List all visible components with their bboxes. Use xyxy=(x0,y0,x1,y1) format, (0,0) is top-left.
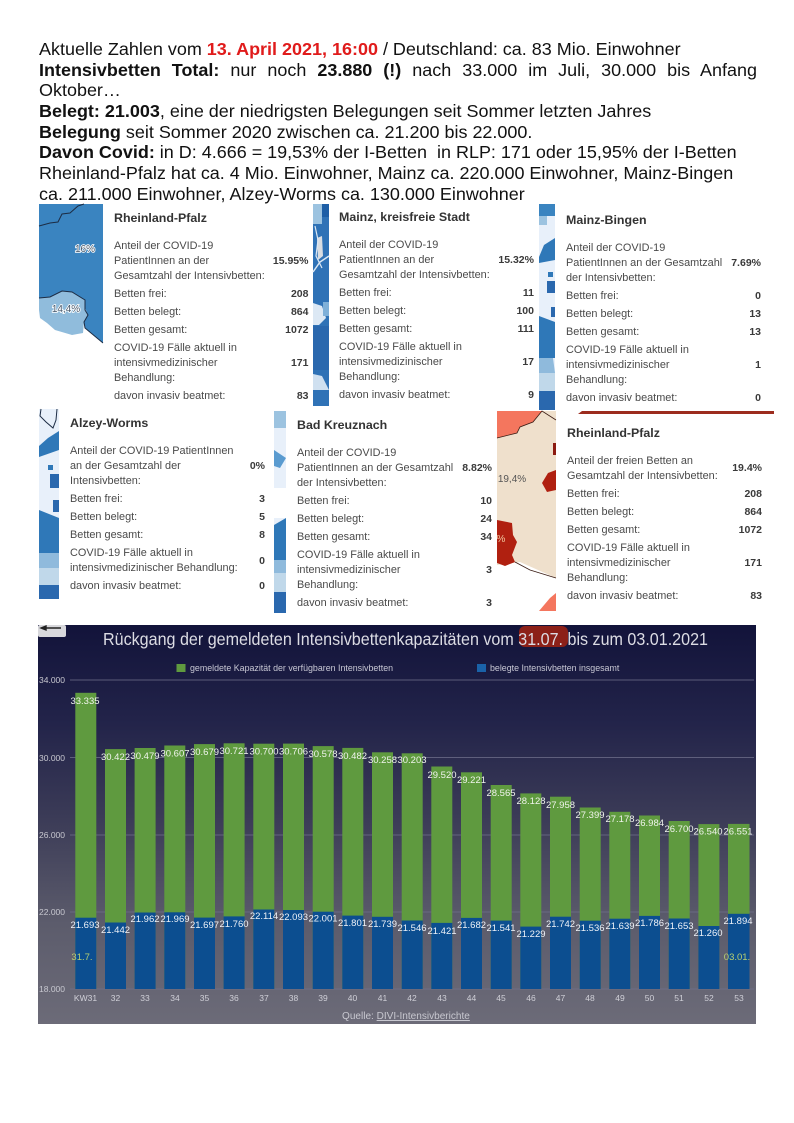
bar 53 xyxy=(723,824,753,1003)
heading: Rheinland-Pfalz xyxy=(567,426,660,440)
stats xyxy=(567,455,763,602)
legend: gemeldete Kapazität der verfügbaren Intensivbetten xyxy=(190,663,393,673)
date highlight xyxy=(519,626,568,647)
stats: 0 xyxy=(755,392,761,404)
bar 48: 48 xyxy=(585,993,595,1003)
intro text block xyxy=(39,39,757,204)
bar 39: 22.001 xyxy=(308,914,338,924)
stats: 100 xyxy=(516,305,534,317)
stats: intensivmedizinischer xyxy=(297,564,401,576)
stats: 171 xyxy=(291,357,309,369)
bar 42: 30.203 xyxy=(397,755,427,766)
stats: Behandlung: xyxy=(567,572,628,584)
bar KW31: 31.7. xyxy=(71,952,93,963)
stats: Betten frei: xyxy=(339,287,392,299)
bar 50: 26.984 xyxy=(635,818,664,829)
bar 37 xyxy=(249,744,279,1003)
bar 32 xyxy=(101,749,130,1003)
bar KW31: 33.335 xyxy=(70,696,100,707)
y axis labels: 18.000 xyxy=(39,984,65,994)
stats: der Intensivbetten: xyxy=(297,477,387,489)
bar 52 xyxy=(693,824,723,1003)
stats: Betten frei: xyxy=(114,288,167,300)
bar 34: 30.607 xyxy=(160,748,190,760)
bar 38 xyxy=(279,744,308,1003)
bar 33: 21.962 xyxy=(130,914,160,925)
bar 51: 21.653 xyxy=(664,921,694,932)
stats: COVID-19 Fälle aktuell in xyxy=(114,342,237,354)
stats: COVID-19 Fälle aktuell in xyxy=(70,547,193,559)
bar 35: 30.679 xyxy=(190,747,219,758)
total intensive beds line: Intensivbetten Total: nur noch 23.880 (!) nach 33.000 im Juli, 30.000 bis Anfang xyxy=(39,60,757,80)
date and population line: Aktuelle Zahlen vom 13. April 2021, 16:00 / Deutschland: ca. 83 Mio. Einwohner xyxy=(39,39,681,59)
bar 48: 27.399 xyxy=(575,810,605,821)
bar 44: 29.221 xyxy=(457,775,486,786)
bar chart panel xyxy=(38,625,756,1024)
stats: 83 xyxy=(750,590,762,602)
bar 53: 26.551 xyxy=(723,826,753,838)
bar 46: 46 xyxy=(526,993,536,1003)
stats: PatientInnen an der xyxy=(339,254,434,266)
stats: 3 xyxy=(486,597,492,609)
stats: intensivmedizinischer xyxy=(566,359,670,371)
bar 49: 49 xyxy=(615,993,625,1003)
map strip: Alzey-Worms xyxy=(39,409,59,599)
panel: Rheinland-Pfalz COVID share xyxy=(39,204,309,402)
bar 52: 26.540 xyxy=(693,826,723,838)
stats: Betten belegt: xyxy=(339,305,406,317)
stats: 0% xyxy=(250,460,266,472)
stats: intensivmedizinischer xyxy=(567,557,671,569)
bar 49 xyxy=(605,812,635,1003)
stats: intensivmedizinischer Behandlung: xyxy=(70,562,238,574)
map: free beds: 19,4% xyxy=(498,474,526,485)
bar 46 xyxy=(516,793,546,1003)
bar 38: 38 xyxy=(289,993,298,1003)
grid lines xyxy=(70,680,754,989)
stats: 15.32% xyxy=(498,254,535,266)
stats: Betten frei: xyxy=(297,495,350,507)
stats: Anteil der COVID-19 xyxy=(566,242,665,254)
bar 33: 30.479 xyxy=(130,751,160,762)
stats: 208 xyxy=(744,488,762,500)
stats: 0 xyxy=(259,555,265,567)
stats: an der Gesamtzahl der xyxy=(70,460,181,472)
heading: Alzey-Worms xyxy=(70,416,148,430)
stats: Behandlung: xyxy=(114,372,175,384)
back arrow button xyxy=(38,625,66,637)
bar 41: 21.739 xyxy=(368,919,397,930)
panel: Alzey-Worms xyxy=(39,409,266,599)
panel: Bad Kreuznach xyxy=(274,411,493,613)
stats: Betten belegt: xyxy=(566,308,633,320)
bar 41: 41 xyxy=(378,993,387,1003)
bar 48 xyxy=(575,808,605,1003)
map: free beds xyxy=(497,411,556,611)
stats: 24 xyxy=(480,513,492,525)
bar 37: 30.700 xyxy=(249,746,279,758)
bar 49: 21.639 xyxy=(605,921,635,932)
stats: intensivmedizinischer xyxy=(339,356,443,368)
heading: Bad Kreuznach xyxy=(297,418,387,432)
stats: 13 xyxy=(749,326,761,338)
bar 44: 21.682 xyxy=(457,920,486,931)
map: Rheinland-Pfalz blue: 16% xyxy=(75,244,95,255)
stats: 7.69% xyxy=(731,257,762,269)
stats: Betten belegt: xyxy=(114,306,181,318)
bar KW31: KW31 xyxy=(74,993,97,1003)
stats: Gesamtzahl der Intensivbetten: xyxy=(567,470,718,482)
stats: Betten gesamt: xyxy=(70,529,143,541)
bar 50: 21.786 xyxy=(635,918,664,929)
bar 36 xyxy=(219,743,249,1003)
bar 43: 43 xyxy=(437,993,447,1003)
stats: 1072 xyxy=(739,524,762,536)
bar 34: 34 xyxy=(170,993,180,1003)
continuation line: Oktober… xyxy=(39,80,121,100)
stats: 111 xyxy=(518,323,534,335)
stats: davon invasiv beatmet: xyxy=(297,597,408,609)
stats: Anteil der COVID-19 xyxy=(339,239,438,251)
stats: 5 xyxy=(259,511,265,523)
stats: Anteil der COVID-19 xyxy=(114,240,213,252)
stats: Betten gesamt: xyxy=(566,326,639,338)
stats: Behandlung: xyxy=(566,374,627,386)
stats: 10 xyxy=(480,495,492,507)
bar 36: 36 xyxy=(229,993,239,1003)
stats: davon invasiv beatmet: xyxy=(566,392,677,404)
bar KW31: 21.693 xyxy=(70,920,100,931)
stats: Anteil der freien Betten an xyxy=(567,455,693,467)
stats xyxy=(566,242,762,404)
bar 47 xyxy=(546,797,575,1003)
stats: 0 xyxy=(259,580,265,592)
bar 37: 22.114 xyxy=(250,911,278,922)
population line two: ca. 211.000 Einwohner, Alzey-Worms ca. 130.000 Einwohner xyxy=(39,184,525,204)
stats: PatientInnen an der xyxy=(114,255,209,267)
bar 35 xyxy=(190,744,219,1003)
bar 53: 53 xyxy=(734,993,744,1003)
bar 39 xyxy=(308,746,338,1003)
stats: Behandlung: xyxy=(297,579,358,591)
stats: Gesamtzahl der Intensivbetten: xyxy=(339,269,490,281)
bar 41: 30.258 xyxy=(368,755,397,766)
bar 47: 21.742 xyxy=(546,919,575,930)
bar 44 xyxy=(457,772,486,1003)
stats: 3 xyxy=(259,493,265,505)
stats: COVID-19 Fälle aktuell in xyxy=(297,549,420,561)
stats xyxy=(70,445,266,592)
bar 49: 27.178 xyxy=(605,814,635,825)
occupied beds line: Belegt: 21.003, eine der niedrigsten Belegungen seit Sommer letzten Jahres xyxy=(39,101,651,121)
bar 34: 21.969 xyxy=(160,914,190,925)
stats: davon invasiv beatmet: xyxy=(114,390,225,402)
stats: 11 xyxy=(523,287,534,299)
y axis labels: 22.000 xyxy=(39,907,65,917)
stats: 171 xyxy=(744,557,762,569)
stats: Behandlung: xyxy=(339,371,400,383)
heading: Rheinland-Pfalz xyxy=(114,211,207,225)
bar 33: 33 xyxy=(140,993,150,1003)
map: Rheinland-Pfalz blue: 14,4% xyxy=(52,304,80,315)
stats: Betten gesamt: xyxy=(114,324,187,336)
stats: Betten belegt: xyxy=(70,511,137,523)
bar 48: 21.536 xyxy=(575,923,605,934)
bar 46: 21.229 xyxy=(516,929,546,940)
bar 36: 21.760 xyxy=(219,919,249,930)
panel: Mainz, kreisfreie Stadt xyxy=(313,204,535,406)
bar 53: 21.894 xyxy=(723,916,753,927)
stats xyxy=(297,447,493,609)
y axis labels xyxy=(39,675,65,994)
stats: COVID-19 Fälle aktuell in xyxy=(566,344,689,356)
bar 34 xyxy=(160,746,190,1003)
stats: intensivmedizinischer xyxy=(114,357,218,369)
bar 50: 50 xyxy=(645,993,654,1003)
map: free beds: % xyxy=(497,534,506,545)
legend: belegte Intensivbetten insgesamt xyxy=(490,663,620,673)
stats: Betten frei: xyxy=(566,290,619,302)
bar 53: 03.01. xyxy=(724,952,750,963)
stats: Betten frei: xyxy=(567,488,620,500)
y axis labels: 26.000 xyxy=(39,830,65,840)
bar 40: 30.482 xyxy=(338,751,367,762)
stats: Gesamtzahl der Intensivbetten: xyxy=(114,270,265,282)
dark red map edge xyxy=(578,411,774,414)
stats xyxy=(339,239,535,401)
bar 47: 27.958 xyxy=(546,800,575,811)
chart title: Rückgang der gemeldeten Intensivbettenkapazitäten vom 31.07. bis zum 03.01.2021 xyxy=(103,629,708,649)
covid share line: Davon Covid: in D: 4.666 = 19,53% der I-Betten in RLP: 171 oder 15,95% der I-Betten xyxy=(39,142,737,162)
bar 45: 21.541 xyxy=(486,923,516,934)
bar 42: 21.546 xyxy=(397,923,427,934)
bar 43 xyxy=(427,766,457,1003)
stats: 208 xyxy=(291,288,309,300)
stats: 9 xyxy=(528,389,534,401)
bar KW31 xyxy=(70,693,100,1003)
stats: Betten belegt: xyxy=(297,513,364,525)
legend xyxy=(176,663,620,673)
stats: 83 xyxy=(297,390,309,402)
bar 51: 51 xyxy=(674,993,684,1003)
bar 46: 28.128 xyxy=(516,796,546,807)
bar 51 xyxy=(664,821,694,1003)
stats: 34 xyxy=(480,531,492,543)
stats: PatientInnen an der Gesamtzahl xyxy=(297,462,453,474)
bar 52: 52 xyxy=(704,993,714,1003)
population line one: Rheinland-Pfalz hat ca. 4 Mio. Einwohner, Mainz ca. 220.000 Einwohner, Mainz-Bingen xyxy=(39,163,733,183)
y axis labels: 30.000 xyxy=(39,753,65,763)
bar 40: 21.801 xyxy=(338,918,367,929)
bar 40: 40 xyxy=(348,993,357,1003)
bar 32: 21.442 xyxy=(101,925,130,936)
stats: COVID-19 Fälle aktuell in xyxy=(567,542,690,554)
stats: COVID-19 Fälle aktuell in xyxy=(339,341,462,353)
stats: Intensivbetten: xyxy=(70,475,141,487)
stats: 3 xyxy=(486,564,492,576)
stats: 0 xyxy=(755,290,761,302)
bar 45 xyxy=(486,785,516,1003)
y axis labels: 34.000 xyxy=(39,675,65,685)
bar 38: 30.706 xyxy=(279,746,308,758)
stats: davon invasiv beatmet: xyxy=(339,389,450,401)
bar 50 xyxy=(635,816,664,1003)
map strip: Mainz xyxy=(313,204,329,406)
bar 37: 37 xyxy=(259,993,269,1003)
map: Rheinland-Pfalz blue xyxy=(39,204,103,343)
stats xyxy=(114,240,309,402)
bar 44: 44 xyxy=(467,993,476,1003)
stats: 8 xyxy=(259,529,265,541)
stats: 1072 xyxy=(285,324,309,336)
stats: Betten gesamt: xyxy=(297,531,370,543)
bar 38: 22.093 xyxy=(279,912,308,923)
stats: Betten belegt: xyxy=(567,506,634,518)
heading: Mainz-Bingen xyxy=(566,213,647,227)
bar 40 xyxy=(338,748,367,1003)
bar 42 xyxy=(397,753,427,1003)
stats: Betten gesamt: xyxy=(567,524,640,536)
stats: 15.95% xyxy=(273,255,309,267)
stats: 13 xyxy=(749,308,761,320)
bar 33 xyxy=(130,748,160,1003)
bar 32: 30.422 xyxy=(101,752,130,763)
panel: Mainz-Bingen xyxy=(539,204,762,410)
stats: PatientInnen an der Gesamtzahl xyxy=(566,257,722,269)
stats: 19.4% xyxy=(732,462,763,474)
stats: 1 xyxy=(755,359,761,371)
bar 43: 21.421 xyxy=(427,926,457,937)
stats: Anteil der COVID-19 xyxy=(297,447,396,459)
bar 36: 30.721 xyxy=(219,746,249,757)
bar 39: 30.578 xyxy=(308,749,338,760)
stats: Betten gesamt: xyxy=(339,323,412,335)
bar 47: 47 xyxy=(556,993,565,1003)
occupancy range line: Belegung seit Sommer 2020 zwischen ca. 21.200 bis 22.000. xyxy=(39,122,532,142)
stats: Anteil der COVID-19 PatientInnen xyxy=(70,445,233,457)
bar 35: 21.697 xyxy=(190,920,219,931)
stats: Betten frei: xyxy=(70,493,123,505)
bar 45: 45 xyxy=(496,993,506,1003)
bar 51: 26.700 xyxy=(664,824,694,835)
stats: 864 xyxy=(744,506,762,518)
bar 32: 32 xyxy=(111,993,120,1003)
bar 43: 29.520 xyxy=(427,770,457,781)
chart background xyxy=(38,625,756,1024)
stats: 8.82% xyxy=(462,462,493,474)
bar 35: 35 xyxy=(200,993,209,1003)
bar 52: 21.260 xyxy=(693,928,723,939)
stats: 864 xyxy=(291,306,309,318)
stats: davon invasiv beatmet: xyxy=(70,580,181,592)
stats: der Intensivbetten: xyxy=(566,272,656,284)
source line: Quelle: DIVI-Intensivberichte xyxy=(342,1011,470,1022)
bar 39: 39 xyxy=(318,993,328,1003)
map strip: Mainz-Bingen xyxy=(539,204,555,410)
heading: Mainz, kreisfreie Stadt xyxy=(339,210,470,224)
stats: 17 xyxy=(522,356,534,368)
bar 45: 28.565 xyxy=(486,788,516,799)
panel: Rheinland-Pfalz free beds xyxy=(497,411,774,611)
bar 42: 42 xyxy=(407,993,417,1003)
bar 41 xyxy=(368,752,397,1003)
stats: davon invasiv beatmet: xyxy=(567,590,678,602)
map strip: Bad Kreuznach xyxy=(274,411,286,613)
